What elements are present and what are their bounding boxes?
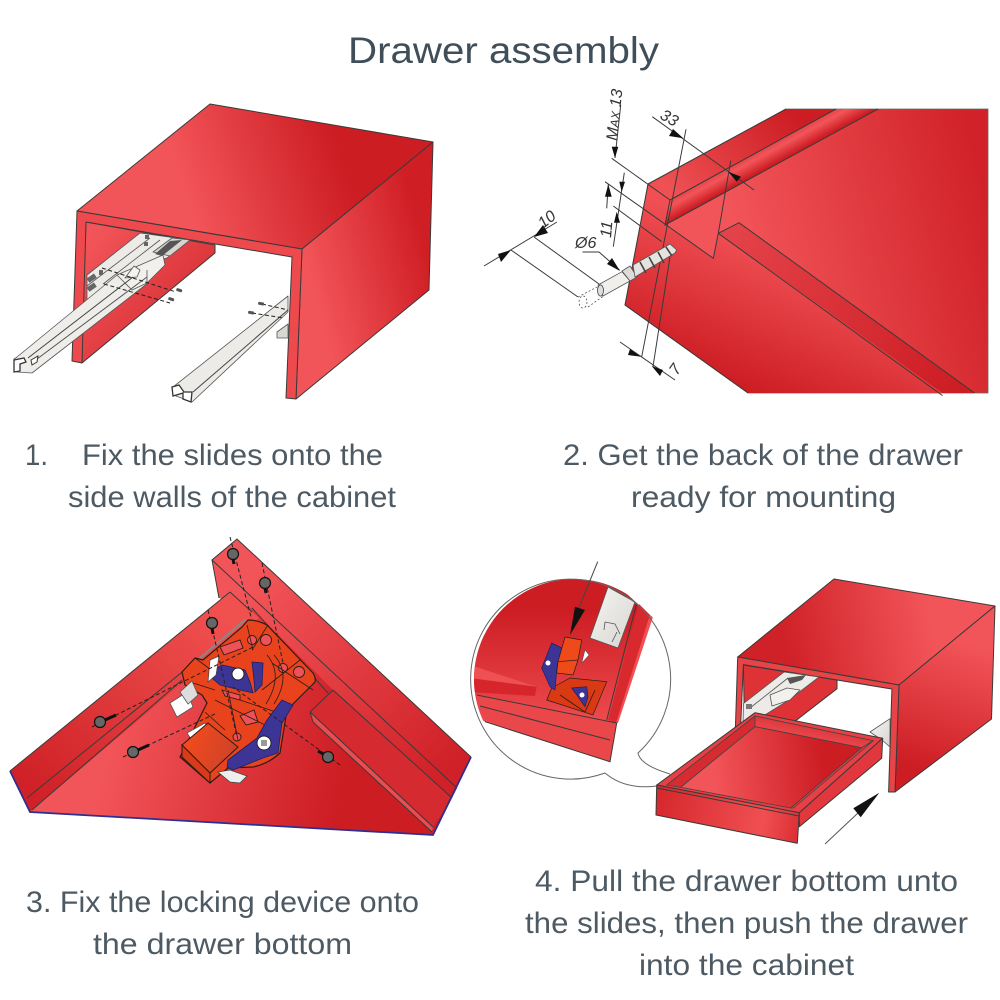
dashed screw guides, left bbox=[102, 268, 176, 303]
drawer back board bbox=[625, 109, 988, 393]
dimension: 11: 11 bbox=[598, 220, 616, 238]
step 1 caption: side walls of the cabinet bbox=[68, 481, 397, 514]
blue lever upper bbox=[212, 662, 263, 693]
inset red drawer corner bbox=[474, 579, 650, 722]
drawer right inner wall bbox=[791, 741, 873, 808]
left slide rail bbox=[14, 255, 165, 373]
cabinet front frame bbox=[72, 211, 302, 399]
left screws bbox=[168, 288, 183, 302]
cabinet right side face bbox=[296, 142, 433, 399]
inset side lip bbox=[608, 604, 650, 723]
back board bbox=[212, 539, 471, 835]
dimension: 10 bbox=[484, 208, 599, 297]
blue base edge bbox=[10, 757, 471, 835]
drawer bbox=[656, 713, 883, 843]
locking device bbox=[170, 619, 315, 783]
step 1 caption: 1. bbox=[25, 439, 48, 472]
white clip lower bbox=[218, 770, 247, 783]
white teeth bbox=[208, 656, 219, 682]
inset lock mechanism bbox=[542, 637, 607, 715]
drawer front face bbox=[656, 785, 799, 843]
step 3 caption bbox=[26, 886, 419, 961]
step 2 caption bbox=[563, 439, 963, 514]
cabinet front frame bbox=[735, 657, 899, 792]
construction lines bbox=[605, 109, 975, 396]
drill bit bbox=[578, 244, 677, 308]
right slide behind drawer bbox=[870, 719, 890, 747]
cabinet top face bbox=[738, 579, 995, 685]
dimension: Ø6: Ø6 bbox=[574, 235, 596, 252]
title: Drawer assembly bbox=[348, 30, 660, 71]
step 3 caption: the drawer bottom bbox=[93, 928, 352, 961]
step 1 caption bbox=[25, 439, 397, 514]
panel: step 4 illustration, inset detail and drawer entering cabinet bbox=[470, 562, 995, 844]
step 3 caption: 3. Fix the locking device onto bbox=[26, 886, 419, 919]
panel: step 1 illustration, cabinet with slides bbox=[14, 104, 433, 402]
housing line detail bbox=[190, 625, 313, 740]
board outlines bbox=[10, 539, 471, 810]
push arrow bbox=[825, 793, 879, 844]
dashed screw guides bbox=[92, 537, 340, 765]
step 4 caption: into the cabinet bbox=[639, 949, 855, 982]
dimension: 7: 7 bbox=[666, 360, 686, 378]
drawer rim bbox=[657, 713, 883, 813]
drawer left inner wall bbox=[667, 716, 755, 787]
dimension: 7 bbox=[628, 349, 686, 378]
groove strip bbox=[665, 109, 878, 225]
slot strip bbox=[718, 223, 975, 393]
grey lip bbox=[200, 619, 246, 658]
inset arrow bbox=[570, 562, 598, 635]
step 1 caption: Fix the slides onto the bbox=[82, 439, 383, 472]
panel: step 3 illustration, locking device on drawer bottom bbox=[10, 537, 471, 835]
dimension: 10: 10 bbox=[535, 208, 560, 232]
left slide mounting plate bbox=[87, 233, 190, 300]
cabinet right side face bbox=[895, 606, 995, 792]
screws bbox=[94, 548, 334, 762]
cabinet inner left wall bbox=[82, 222, 215, 363]
inset circle outline with callout tail bbox=[471, 579, 671, 787]
slide in cabinet bbox=[743, 672, 819, 726]
left side board bbox=[10, 592, 259, 812]
dimension: Ø6 bbox=[574, 235, 620, 271]
drawer bottom base bbox=[10, 539, 471, 835]
drawer side face bbox=[799, 738, 883, 827]
step 2 caption: ready for mounting bbox=[631, 481, 896, 514]
drawer inner floor bbox=[681, 727, 862, 808]
housing cut-outs bbox=[220, 634, 304, 741]
dimension: 33 bbox=[657, 107, 741, 182]
blue lever lower bbox=[227, 700, 293, 770]
lower rear and side face bbox=[625, 184, 942, 393]
orange box bbox=[182, 723, 238, 783]
white clip left bbox=[170, 681, 198, 717]
cabinet inner wall bbox=[743, 665, 837, 760]
panel: step 2 illustration, drawer back with drilling dimensions bbox=[484, 88, 988, 396]
step 4 caption: the slides, then push the drawer bbox=[525, 907, 968, 940]
dimension: 33: 33 bbox=[657, 107, 681, 130]
right block bbox=[310, 690, 452, 832]
step 2 caption: 2. Get the back of the drawer bbox=[563, 439, 963, 472]
dashed screw guides, right bbox=[252, 304, 288, 318]
drawer back inner wall bbox=[755, 716, 873, 748]
white clip upper bbox=[187, 723, 208, 739]
inset detail circle bbox=[470, 562, 671, 787]
step 4 caption: 4. Pull the drawer bottom unto bbox=[535, 865, 958, 898]
upper edge strip bbox=[648, 109, 836, 200]
step 4 caption bbox=[525, 865, 968, 982]
cabinet top face bbox=[77, 104, 433, 249]
right screws bbox=[248, 302, 264, 315]
right slide rail bbox=[172, 296, 288, 402]
dimension: 11 bbox=[598, 173, 625, 247]
inset rail bbox=[470, 678, 537, 696]
inset front strip bbox=[475, 694, 480, 711]
dimension: Max 13: MAX 13 bbox=[604, 88, 626, 141]
inset white slide bbox=[590, 587, 635, 648]
orange housing bbox=[180, 620, 315, 783]
